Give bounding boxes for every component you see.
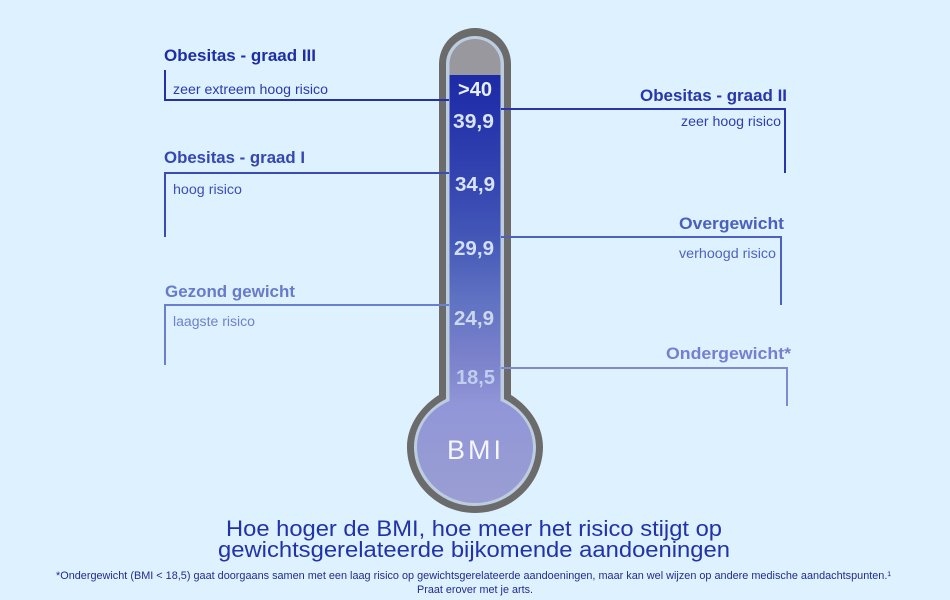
headline: gewichtsgerelateerde bijkomende aandoeningen <box>218 537 730 562</box>
headline: Hoe hoger de BMI, hoe meer het risico stijgt op <box>226 516 722 541</box>
callout: Ondergewicht: Ondergewicht* <box>666 345 792 363</box>
callout: Obesitas graad III: Obesitas - graad III <box>164 47 316 65</box>
headline <box>218 516 730 562</box>
thermometer <box>407 28 543 513</box>
footnote: *Ondergewicht (BMI < 18,5) gaat doorgaans samen met een laag risico op gewichtsgerelateerde aandoeningen, maar kan wel wijzen op andere medische aandachtspunten.¹ <box>56 570 891 582</box>
footnote <box>56 570 891 596</box>
thermometer outer casing <box>407 28 543 513</box>
callout: Overgewicht: Overgewicht <box>679 215 785 233</box>
bulb label BMI: BMI <box>447 435 501 465</box>
callout: Ondergewicht <box>501 345 792 406</box>
callout: Overgewicht: verhoogd risico <box>679 246 776 261</box>
callout: Obesitas graad III: zeer extreem hoog risico <box>173 82 328 97</box>
thermometer scale values: 29,9 <box>454 237 494 260</box>
callout: Obesitas graad II: zeer hoog risico <box>681 114 781 129</box>
callout: Gezond gewicht: Gezond gewicht <box>165 283 296 301</box>
fluid column and bulb <box>417 75 533 503</box>
thermometer scale values <box>453 78 495 389</box>
callout: Gezond gewicht: laagste risico <box>173 314 255 329</box>
footnote: Praat erover met je arts. <box>417 584 533 596</box>
empty tube top <box>450 39 500 76</box>
thermometer scale values: 39,9 <box>453 110 494 133</box>
callout: Obesitas graad I: Obesitas - graad I <box>164 149 305 167</box>
callout: Gezond gewicht <box>165 283 449 365</box>
thermometer scale values: 18,5 <box>456 366 495 389</box>
callout: Obesitas graad II: Obesitas - graad II <box>640 87 787 105</box>
callout: Overgewicht <box>501 215 785 305</box>
callout: Obesitas graad I <box>164 149 449 237</box>
thermometer scale values: >40 <box>458 78 492 101</box>
thermometer inner rim <box>414 36 536 506</box>
callout: Obesitas graad I: hoog risico <box>173 182 242 197</box>
callout: Obesitas graad III <box>164 47 449 100</box>
thermometer scale values: 24,9 <box>454 307 494 330</box>
thermometer scale values: 34,9 <box>455 173 495 196</box>
callout: Obesitas graad II <box>501 87 787 173</box>
